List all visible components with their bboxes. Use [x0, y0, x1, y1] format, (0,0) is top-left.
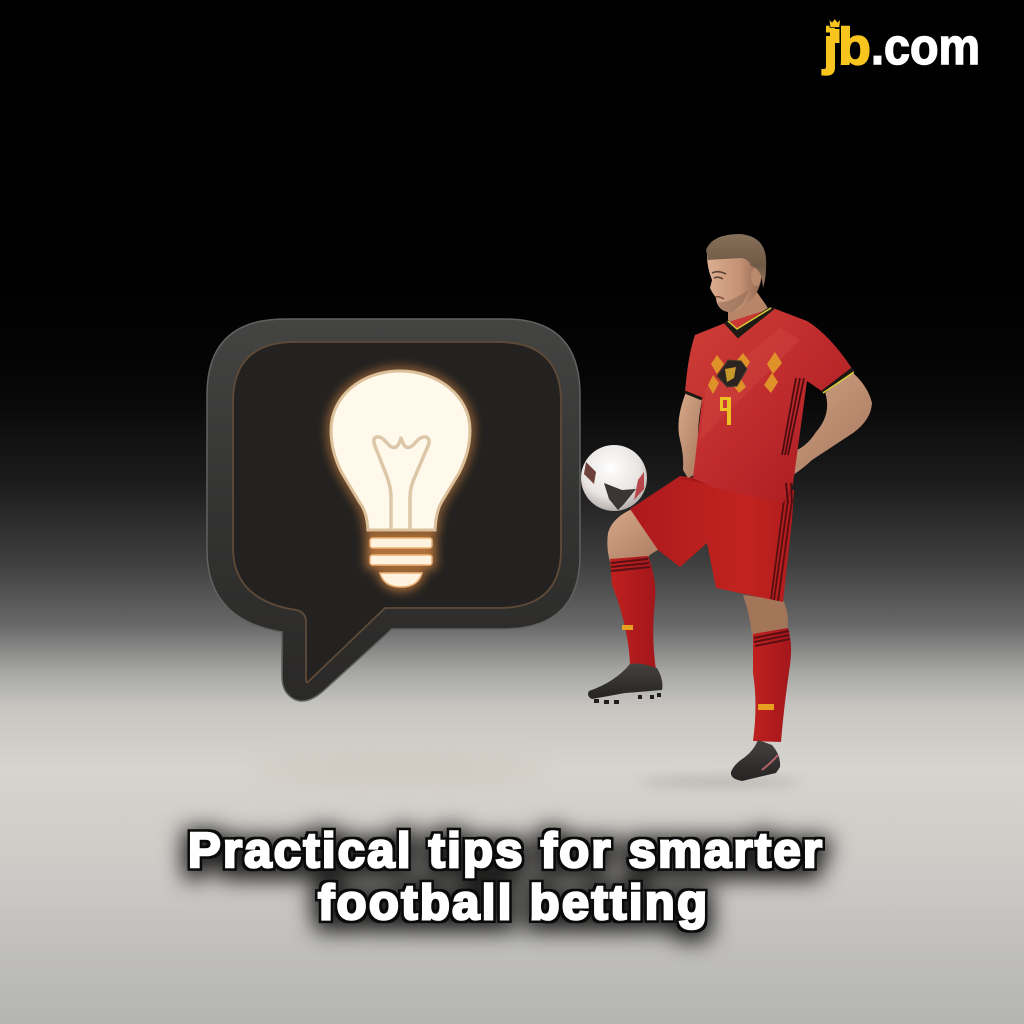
- raised foot: boot: [588, 664, 662, 702]
- title: [188, 824, 822, 930]
- number 9: [720, 397, 731, 425]
- floor shadow under speech bubble: [250, 760, 550, 780]
- shorts fold shadow: [680, 478, 793, 503]
- logo: jb.com: [822, 18, 980, 76]
- raised leg: sock: [610, 556, 656, 670]
- diamond pattern: [708, 352, 782, 394]
- title line 2: football betting: [318, 876, 707, 930]
- bubble frame: [207, 319, 580, 701]
- shorts: [630, 476, 794, 602]
- base cap: [380, 573, 422, 587]
- floor shadow under player: [640, 777, 800, 787]
- collar: [725, 307, 773, 337]
- jersey diagonal sheen: [700, 328, 800, 440]
- base thread top: [370, 538, 432, 548]
- icon: crown: [829, 18, 841, 28]
- jersey: [685, 307, 854, 503]
- bulb glow: [331, 371, 470, 591]
- brow and eye: [712, 272, 726, 279]
- stubble: [718, 290, 748, 312]
- neck: [728, 285, 770, 332]
- standing leg: knee: [743, 595, 788, 636]
- filament: [374, 437, 429, 529]
- lightbulb icon: [331, 371, 470, 587]
- base thread middle: [370, 555, 432, 565]
- crest: [717, 360, 747, 387]
- football player: [581, 234, 872, 781]
- logo letters jb: jb: [822, 18, 871, 76]
- face: [707, 250, 762, 312]
- speech bubble with lightbulb: [207, 319, 580, 701]
- left arm and hand on hip: [678, 392, 704, 478]
- hair: [706, 234, 766, 288]
- bulb glass: [331, 371, 470, 530]
- football: [581, 445, 647, 511]
- logo letters .com: .com: [871, 18, 980, 75]
- raised leg: thigh: [607, 509, 677, 562]
- right arm and hand on hip: [753, 372, 872, 487]
- bubble panel: [233, 342, 561, 682]
- shorts stripes: [771, 500, 792, 601]
- side stripes: [782, 378, 804, 503]
- left cuff: [685, 392, 702, 399]
- title line 1: Practical tips for smarter: [188, 824, 822, 878]
- ear: [751, 268, 761, 286]
- standing leg: sock: [753, 628, 791, 742]
- standing foot: boot: [731, 740, 780, 781]
- mouth: [715, 297, 724, 299]
- j stem extension: [830, 29, 840, 43]
- sleeve cuff: [823, 369, 853, 392]
